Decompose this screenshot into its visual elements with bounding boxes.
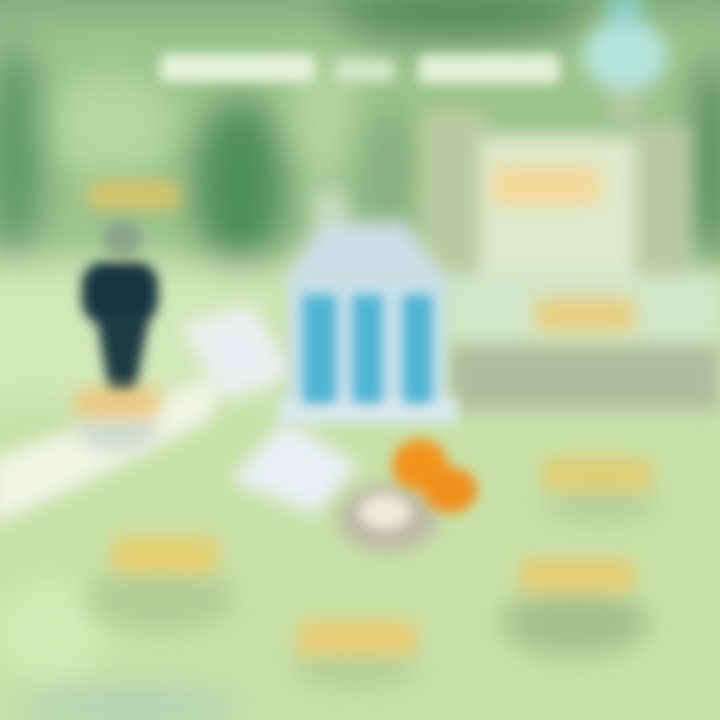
label below figure (76, 388, 160, 416)
label above figure (88, 182, 180, 208)
figure body (82, 220, 158, 395)
paper sheet upper (180, 305, 295, 400)
orange items (392, 439, 477, 513)
label (520, 558, 634, 592)
monument pedestal (420, 110, 720, 410)
icon: columned building (278, 190, 458, 424)
text block: left lower (84, 537, 236, 632)
building pediment (282, 190, 452, 285)
text block: right upper (540, 458, 660, 523)
building backing and base (278, 278, 458, 424)
label (542, 458, 652, 490)
bowl (338, 484, 438, 552)
icon: water drop finial (583, 0, 667, 125)
label (112, 537, 218, 573)
figure: person in dark suit (76, 182, 180, 452)
shadow patch (540, 483, 660, 523)
figure base (76, 408, 160, 452)
background: forest (0, 0, 720, 405)
label (297, 620, 417, 656)
shadow patch (84, 564, 236, 632)
shadow patch (501, 588, 649, 656)
building columns (303, 295, 432, 403)
bowl contents (359, 494, 411, 530)
paper sheet lower (230, 420, 360, 515)
label on monument lower (535, 298, 635, 332)
path (0, 370, 225, 525)
text block: center lower (290, 620, 420, 689)
text block: right lower (501, 558, 649, 656)
icon: bowl with orange items (338, 439, 477, 552)
label on monument upper (492, 166, 600, 204)
shadow patch (290, 645, 420, 689)
title (160, 54, 560, 84)
background: lower lawn shading (0, 425, 720, 720)
